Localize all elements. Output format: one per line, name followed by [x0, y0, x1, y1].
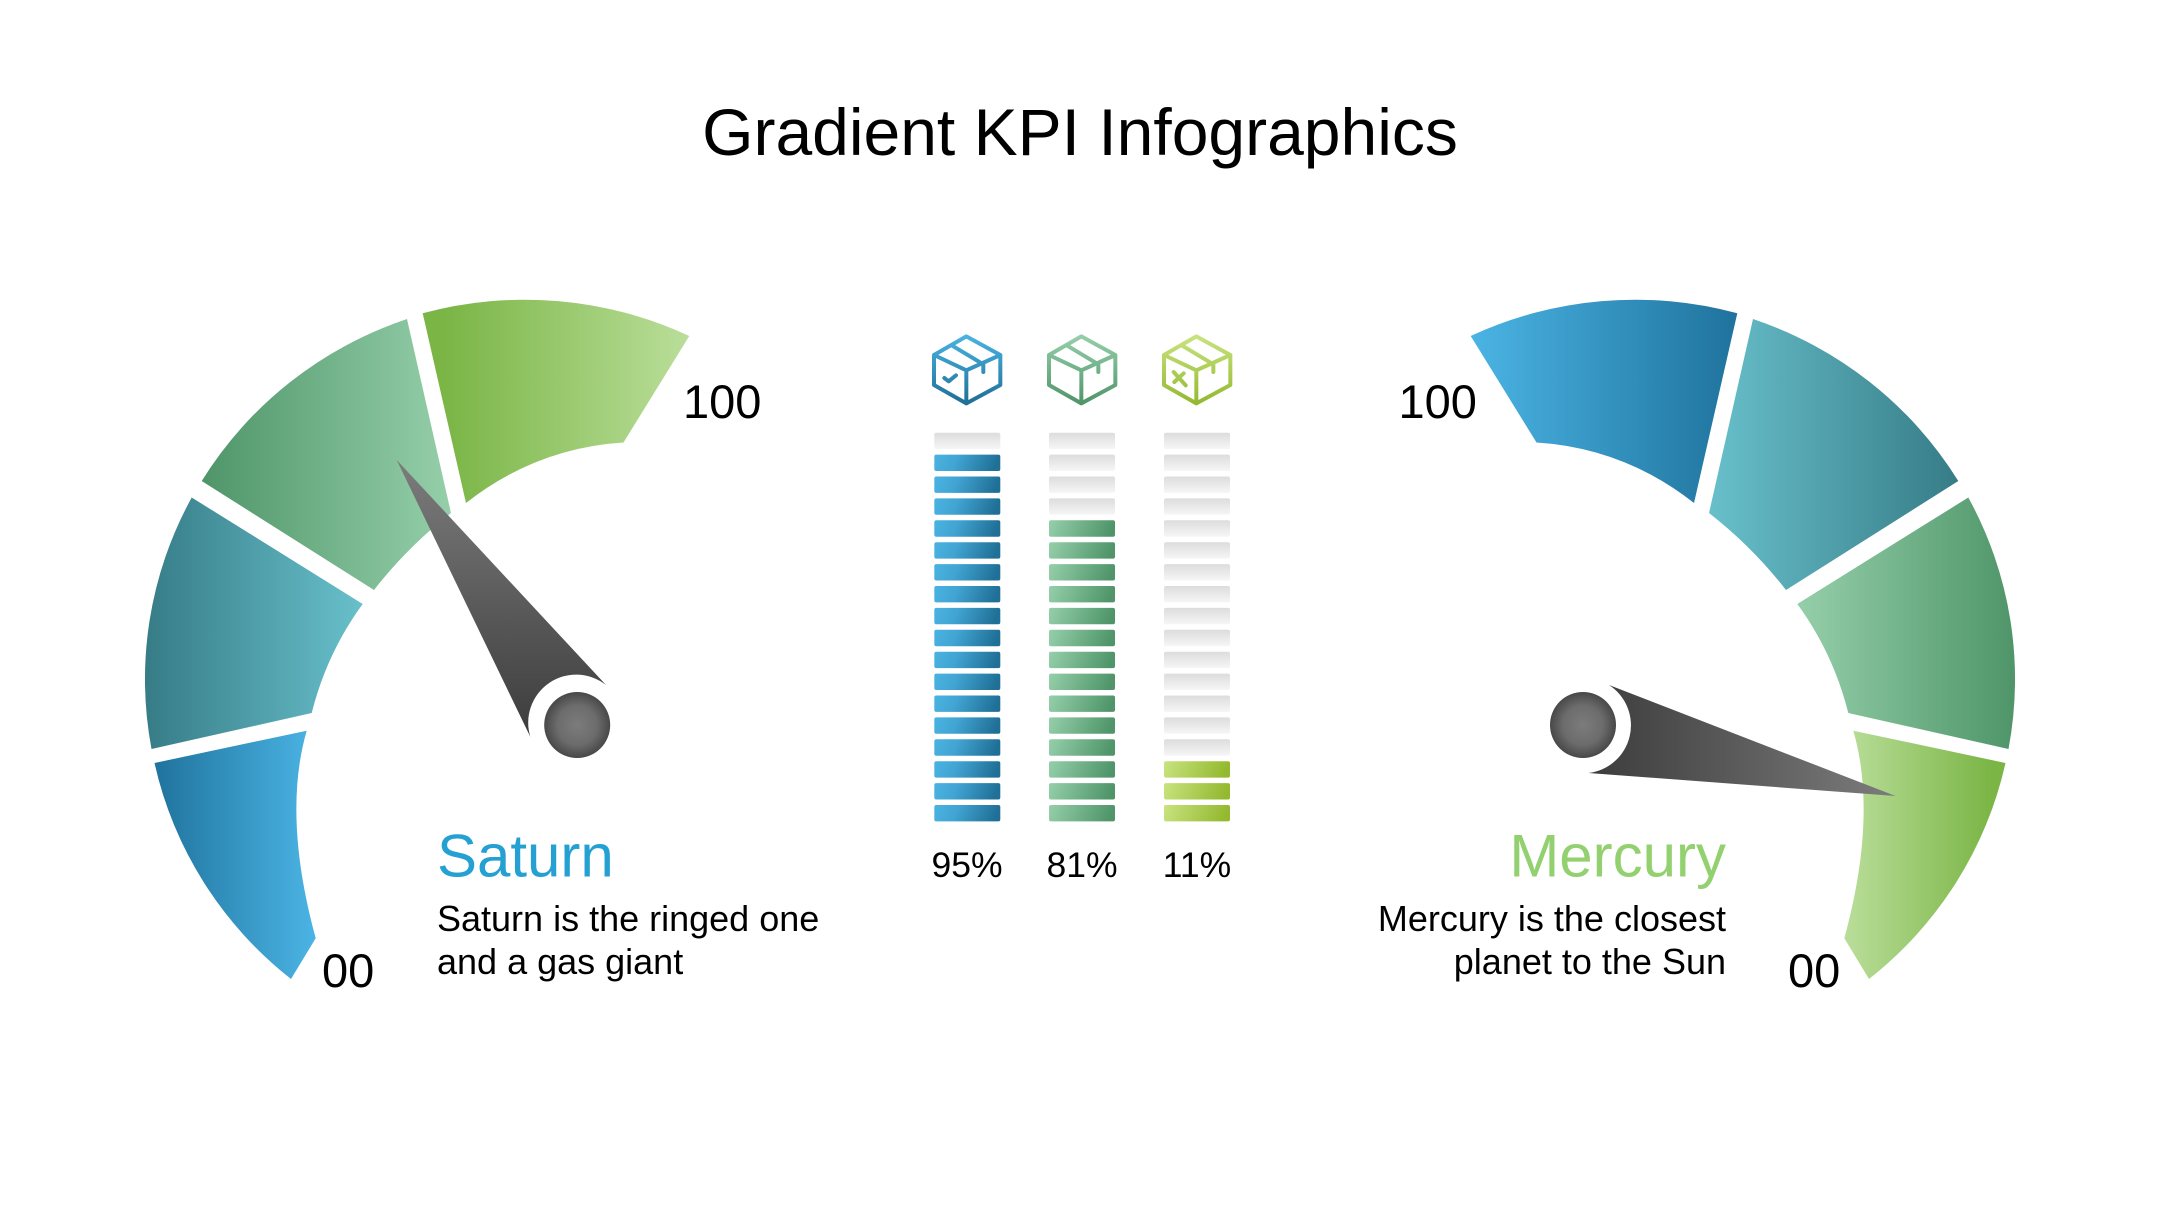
panel: Mercury gauge [1398, 300, 2015, 997]
panel: package bars [931, 336, 1231, 885]
gauge hub [1550, 692, 1616, 758]
text block: Saturn description: and a gas giant [437, 941, 683, 982]
gauge segments (mirrored) [1471, 300, 2015, 979]
gauge segment: lime [1844, 731, 2006, 979]
gauge needle [1588, 685, 1896, 796]
text block: Mercury description: Mercury is the closest [1378, 898, 1726, 939]
title: Gradient KPI Infographics [702, 95, 1458, 169]
gauge segment: lime [423, 300, 689, 503]
gauge segment: blue [1471, 300, 1737, 503]
gauge segment: mint [1797, 498, 2015, 749]
text block: Mercury description: planet to the Sun [1454, 941, 1726, 982]
icon: box with check [934, 336, 1000, 403]
text block: Saturn description: Saturn is the ringed one [437, 898, 819, 939]
gauge segment: blue [154, 731, 316, 979]
gauge needle [397, 460, 606, 737]
gauge segment: mint [202, 319, 451, 590]
heading: Saturn: Saturn [437, 822, 614, 890]
scale label: 100: 100 [1398, 375, 1477, 428]
bar column: 11% [1164, 433, 1230, 821]
scale label: 00: 00 [322, 944, 374, 997]
value: 81%: 81% [1046, 845, 1118, 885]
bar column: 95% [934, 433, 1000, 821]
gauge hub [544, 692, 610, 758]
gauge segment: teal [1709, 319, 1958, 590]
gauge segment: teal [145, 498, 363, 749]
scale label: 100: 100 [683, 375, 761, 428]
value: 11%: 11% [1163, 845, 1231, 885]
icon: box with cross [1164, 336, 1230, 403]
bar column: 81% [1049, 433, 1115, 821]
icon: box [1049, 336, 1115, 403]
panel: Saturn gauge [145, 300, 761, 997]
heading: Mercury: Mercury [1509, 822, 1726, 890]
scale label: 00: 00 [1788, 944, 1840, 997]
value: 95%: 95% [931, 845, 1003, 885]
